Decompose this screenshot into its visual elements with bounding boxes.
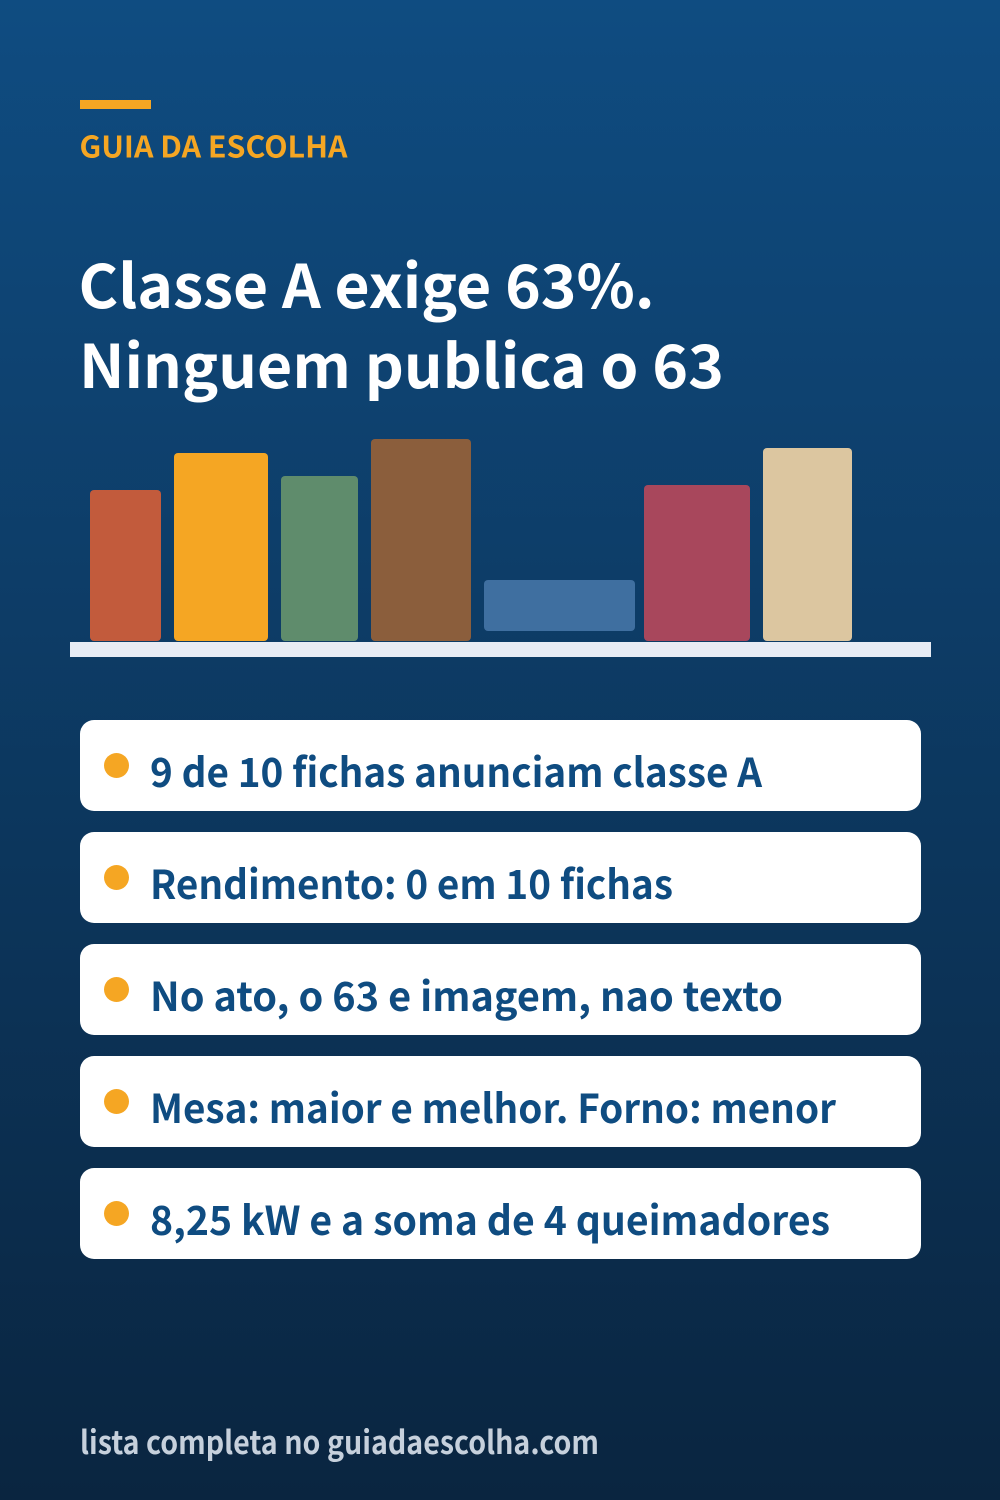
bar 4: brown: [371, 439, 471, 641]
bullet: [104, 1089, 129, 1114]
bullet: [104, 1201, 129, 1226]
footer link text: lista completa no guiadaescolha.com: [80, 1418, 599, 1464]
bar 5: blue: [484, 580, 635, 631]
list card 2: [80, 832, 921, 923]
title: Ninguem publica o 63: [79, 319, 724, 406]
card text: No ato, o 63 e imagem, nao texto: [150, 965, 783, 1023]
list card 4: [80, 1056, 921, 1147]
card text: Rendimento: 0 em 10 fichas: [150, 853, 673, 911]
bar chart: shelf of products: [70, 439, 931, 657]
list card 3: [80, 944, 921, 1035]
shelf line: [70, 642, 931, 657]
card text: 8,25 kW e a soma de 4 queimadores: [150, 1189, 830, 1247]
bar 6: crimson: [644, 485, 750, 641]
title: [78, 239, 724, 406]
bar 1: terracotta: [90, 490, 161, 641]
bullet: [104, 977, 129, 1002]
bar 2: amber: [174, 453, 268, 641]
eyebrow heading: GUIA DA ESCOLHA: [80, 122, 348, 166]
card text: Mesa: maior e melhor. Forno: menor: [150, 1077, 837, 1135]
bar 3: green: [281, 476, 358, 641]
bar 7: beige: [763, 448, 852, 641]
title: Classe A exige 63%.: [78, 239, 654, 326]
list card 5: [80, 1168, 921, 1259]
bullet: [104, 865, 129, 890]
header accent bar: [80, 100, 151, 109]
list card 1: [80, 720, 921, 811]
bullet: [104, 753, 129, 778]
card text: 9 de 10 fichas anunciam classe A: [150, 741, 762, 799]
